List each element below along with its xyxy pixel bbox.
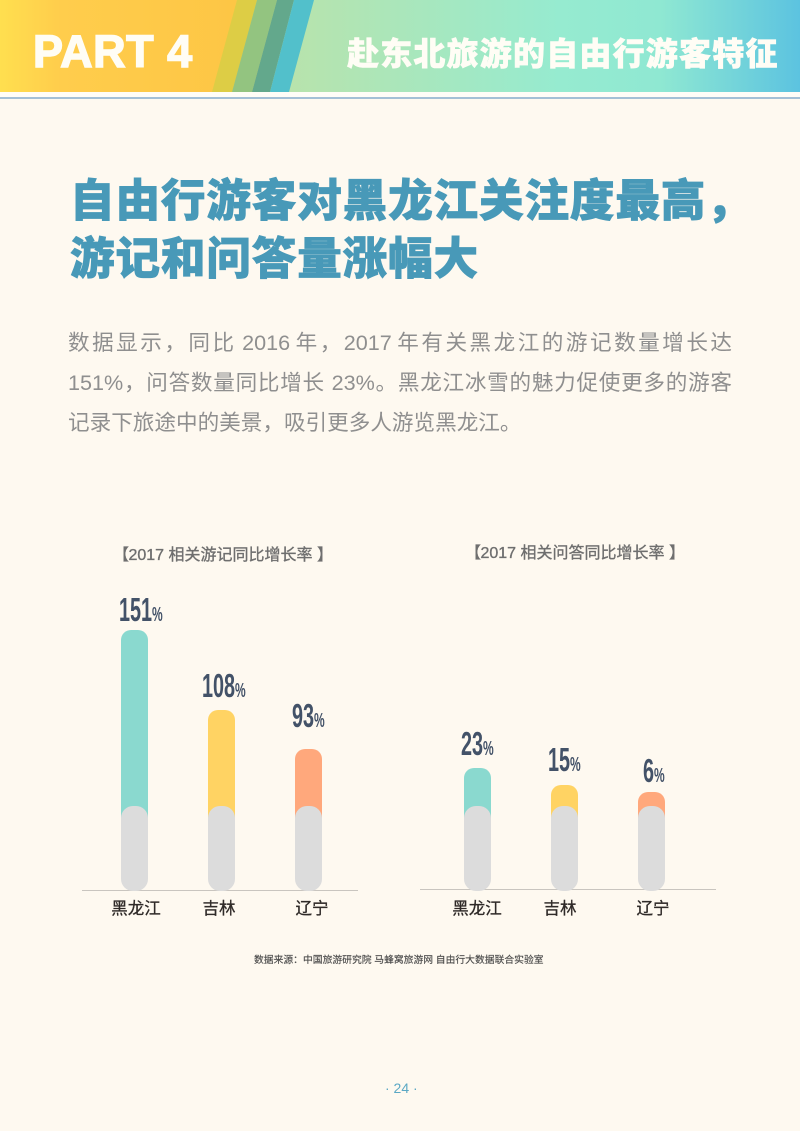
gray base 3	[295, 806, 322, 891]
chart heading: 【 2017 相关游记同比增长率 】	[113, 547, 333, 564]
value 6%: 6%	[643, 752, 665, 789]
header title: 赴东北旅游的自由行游客特征	[347, 36, 779, 72]
gray base 6	[638, 806, 664, 891]
label 辽宁: 辽宁	[296, 900, 328, 918]
main heading	[70, 176, 752, 284]
label 黑龙江: 黑龙江	[111, 900, 161, 918]
bar: 吉林 Q&A	[551, 785, 578, 870]
bar: 吉林 travel notes	[208, 710, 234, 870]
label 辽宁: 辽宁	[636, 900, 670, 918]
page number: · 24 ·	[385, 1080, 418, 1096]
value 23%: 23%	[461, 725, 494, 762]
gray base 2	[208, 806, 234, 891]
value 108%: 108%	[202, 667, 246, 704]
bar: 黑龙江 Q&A	[464, 768, 490, 870]
intro paragraph: 151%，问答数量同比增长 23%。黑龙江冰雪的魅力促使更多的游客	[68, 370, 732, 395]
gray base 5	[551, 806, 578, 891]
header rule	[0, 97, 800, 99]
main heading: 游记和问答量涨幅大	[70, 235, 479, 284]
decorative slanted stripes	[212, 0, 314, 92]
baseline right	[420, 889, 716, 890]
bar: 辽宁 travel notes	[295, 749, 322, 870]
bar: 黑龙江 travel notes	[121, 630, 148, 870]
data source note: 数据来源：中国旅游研究院 马蜂窝旅游网 自由行大数据联合实验室	[254, 955, 544, 966]
chart heading: 【 2017 相关问答同比增长率 】	[465, 545, 685, 562]
baseline left	[82, 890, 358, 891]
value 15%: 15%	[548, 741, 581, 778]
value 151%: 151%	[119, 591, 163, 628]
bar: 辽宁 Q&A	[638, 792, 664, 870]
part label: PART 4	[33, 26, 193, 77]
intro paragraph: 记录下旅途中的美景，吸引更多人游览黑龙江。	[68, 410, 521, 435]
label 吉林: 吉林	[202, 900, 236, 918]
main heading: 自由行游客对黑龙江关注度最高，	[70, 177, 752, 226]
label 吉林: 吉林	[544, 900, 576, 918]
header banner	[0, 0, 800, 92]
intro paragraph: 数据显示，同比 2016 年，2017 年有关黑龙江的游记数量增长达	[68, 330, 732, 355]
gray base 4	[464, 806, 490, 891]
intro paragraph	[68, 330, 732, 435]
value 93%: 93%	[292, 697, 325, 734]
gray base 1	[121, 806, 148, 891]
label 黑龙江: 黑龙江	[452, 900, 502, 918]
